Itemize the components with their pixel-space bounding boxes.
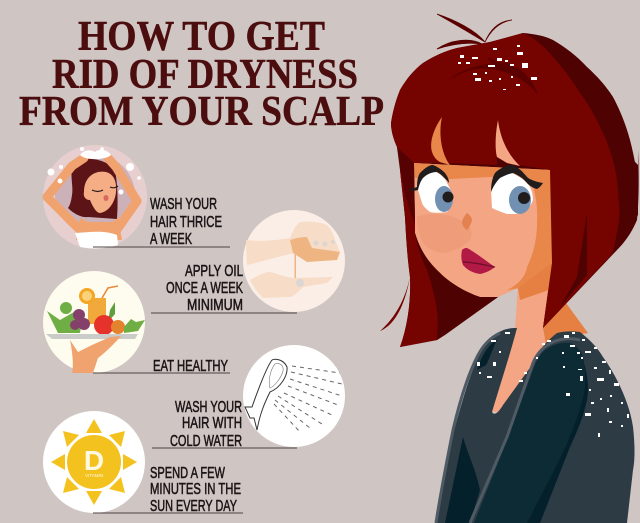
nose	[462, 213, 472, 230]
neck shadow	[518, 263, 552, 300]
neck and shoulder	[490, 275, 552, 412]
title	[19, 14, 384, 135]
hair back	[391, 33, 639, 347]
label: spend a few minutes in the sun every day	[93, 465, 243, 515]
label: wash your hair with cold water	[152, 399, 297, 450]
label: wash your hair with cold water: COLD WATER	[170, 433, 242, 450]
title: RID OF DRYNESS	[52, 52, 358, 98]
label: apply oil once a week minimum: APPLY OIL	[185, 263, 243, 280]
label: wash your hair thrice a week: HAIR THRICE	[150, 214, 222, 231]
label: wash your hair with cold water: WASH YOUR	[175, 399, 242, 416]
tip 3: eat healthy	[43, 271, 230, 375]
label: wash your hair with cold water: HAIR WITH	[182, 415, 242, 432]
icon: vitamin D sun	[43, 411, 145, 513]
title: HOW TO GET	[78, 14, 325, 60]
stray hairs and scalp flakes	[437, 14, 537, 93]
icon: hands and oil bottle	[243, 210, 345, 312]
icon: vitamin D sun: D	[84, 445, 104, 476]
label: apply oil once a week minimum	[151, 263, 297, 314]
label: wash your hair thrice a week: WASH YOUR	[150, 196, 217, 213]
icon: shower head with spray	[243, 345, 345, 447]
label: spend a few minutes in the sun every day: MINUTES IN THE	[150, 481, 241, 498]
illustration: woman with dry scalp	[380, 14, 639, 523]
label: eat healthy	[93, 358, 230, 375]
tip 5: sun	[43, 411, 243, 515]
label: wash your hair thrice a week	[93, 196, 230, 248]
icon: plate of fruit and vegetables	[43, 271, 145, 373]
eyes	[408, 165, 543, 214]
tip 1: wash hair thrice a week	[43, 145, 230, 249]
icon: vitamin D sun: VITAMIN	[85, 473, 103, 478]
label: spend a few minutes in the sun every day: SPEND A FEW	[150, 465, 226, 482]
tip 2: apply oil once a week	[151, 210, 345, 314]
lips	[461, 248, 495, 274]
top and jacket	[435, 328, 634, 523]
label: wash your hair thrice a week: A WEEK	[150, 231, 192, 248]
label: eat healthy: EAT HEALTHY	[153, 358, 228, 375]
icon: woman washing hair	[43, 145, 147, 249]
label: spend a few minutes in the sun every day: SUN EVERY DAY	[150, 498, 237, 515]
hair front	[380, 33, 638, 347]
face	[414, 163, 552, 297]
tip 4: cold water	[152, 345, 345, 450]
label: apply oil once a week minimum: MINIMUM	[187, 297, 243, 314]
label: apply oil once a week minimum: ONCE A WEEK	[166, 280, 243, 297]
title: FROM YOUR SCALP	[19, 89, 384, 135]
